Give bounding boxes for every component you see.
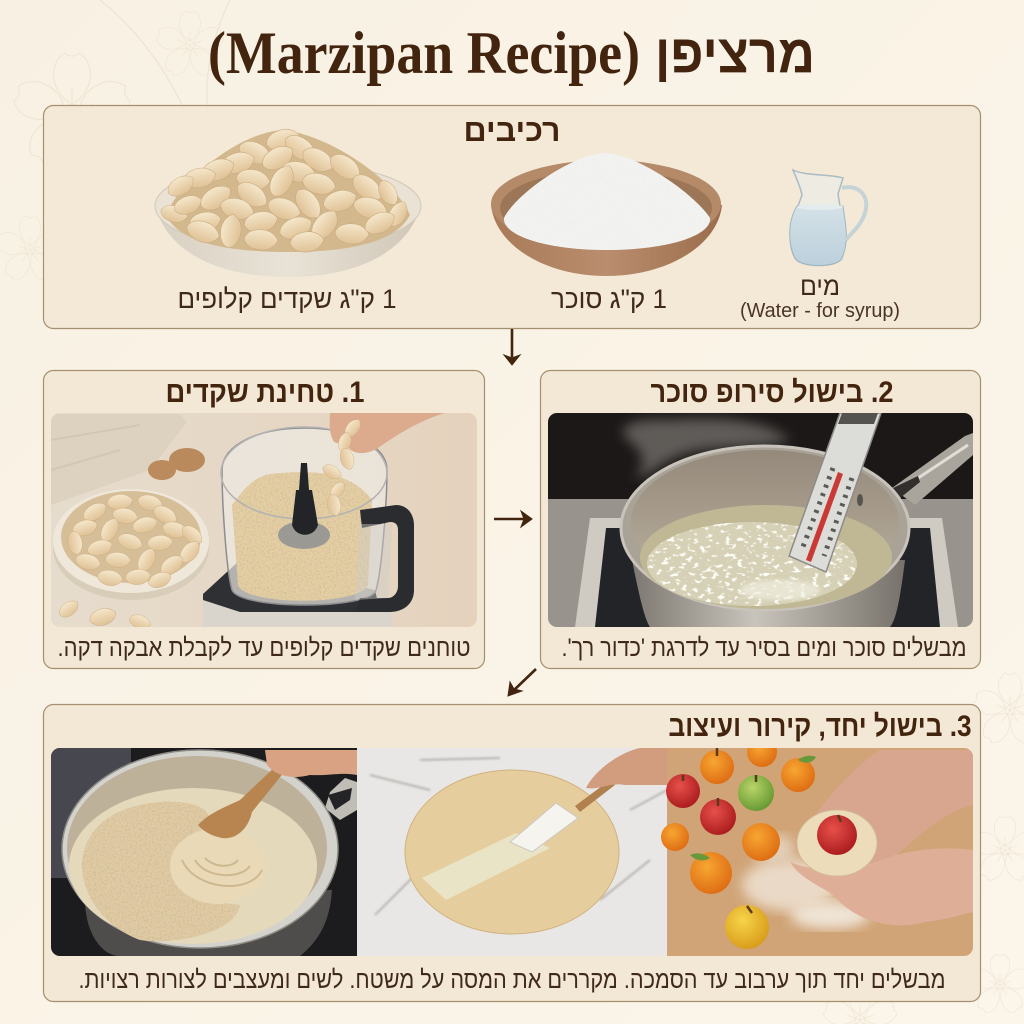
decorative blossoms bottom right: [821, 673, 1024, 1024]
photo strip: [51, 737, 973, 956]
panel: step 2 sugar syrup: [540, 370, 980, 668]
ingredient: sugar in bowl: [491, 153, 722, 276]
panel: ingredients: [44, 106, 980, 328]
decorative blossoms top left: [0, 0, 230, 284]
photo: rolling dough on marble: [357, 748, 667, 956]
label: water: (Water - for syrup): [740, 300, 900, 322]
panel: step 1 grinding almonds: [44, 370, 484, 668]
label: almonds quantity: 1 ק"ג שקדים קלופים: [178, 284, 396, 314]
step 1 caption: טוחנים שקדים קלופים עד לקבלת אבקה דקה.: [58, 634, 470, 662]
photo: stirring in pot: [51, 748, 357, 956]
photo: marzipan fruits being shaped: [661, 737, 973, 956]
title: מרציפן: [655, 24, 815, 84]
label: sugar quantity: 1 ק"ג סוכר: [551, 284, 667, 314]
step 2 caption: מבשלים סוכר ומים בסיר עד לדרגת 'כדור רך'.: [562, 634, 966, 662]
title: (Marzipan Recipe): [208, 20, 640, 86]
arrow: step 2 to step 3: [508, 669, 536, 696]
arrow: ingredients to step 1: [504, 329, 520, 365]
photo: boiling syrup with thermometer: [548, 413, 973, 627]
label: water: מים: [800, 271, 840, 301]
ingredients heading: רכיבים: [464, 113, 560, 148]
ingredient: water jug: [790, 170, 866, 266]
step 2 heading: 2. בישול סירופ סוכר: [650, 376, 894, 409]
ingredient: almonds in bowl: [155, 126, 421, 277]
label: water: [740, 271, 900, 322]
arrow: step 1 to step 2: [494, 511, 532, 527]
panel: step 3 cook cool shape: [44, 704, 980, 1002]
step 3 heading: 3. בישול יחד, קירור ועיצוב: [668, 710, 972, 743]
step 1 heading: 1. טחינת שקדים: [166, 376, 364, 409]
photo: food processor with almonds: [51, 413, 477, 632]
